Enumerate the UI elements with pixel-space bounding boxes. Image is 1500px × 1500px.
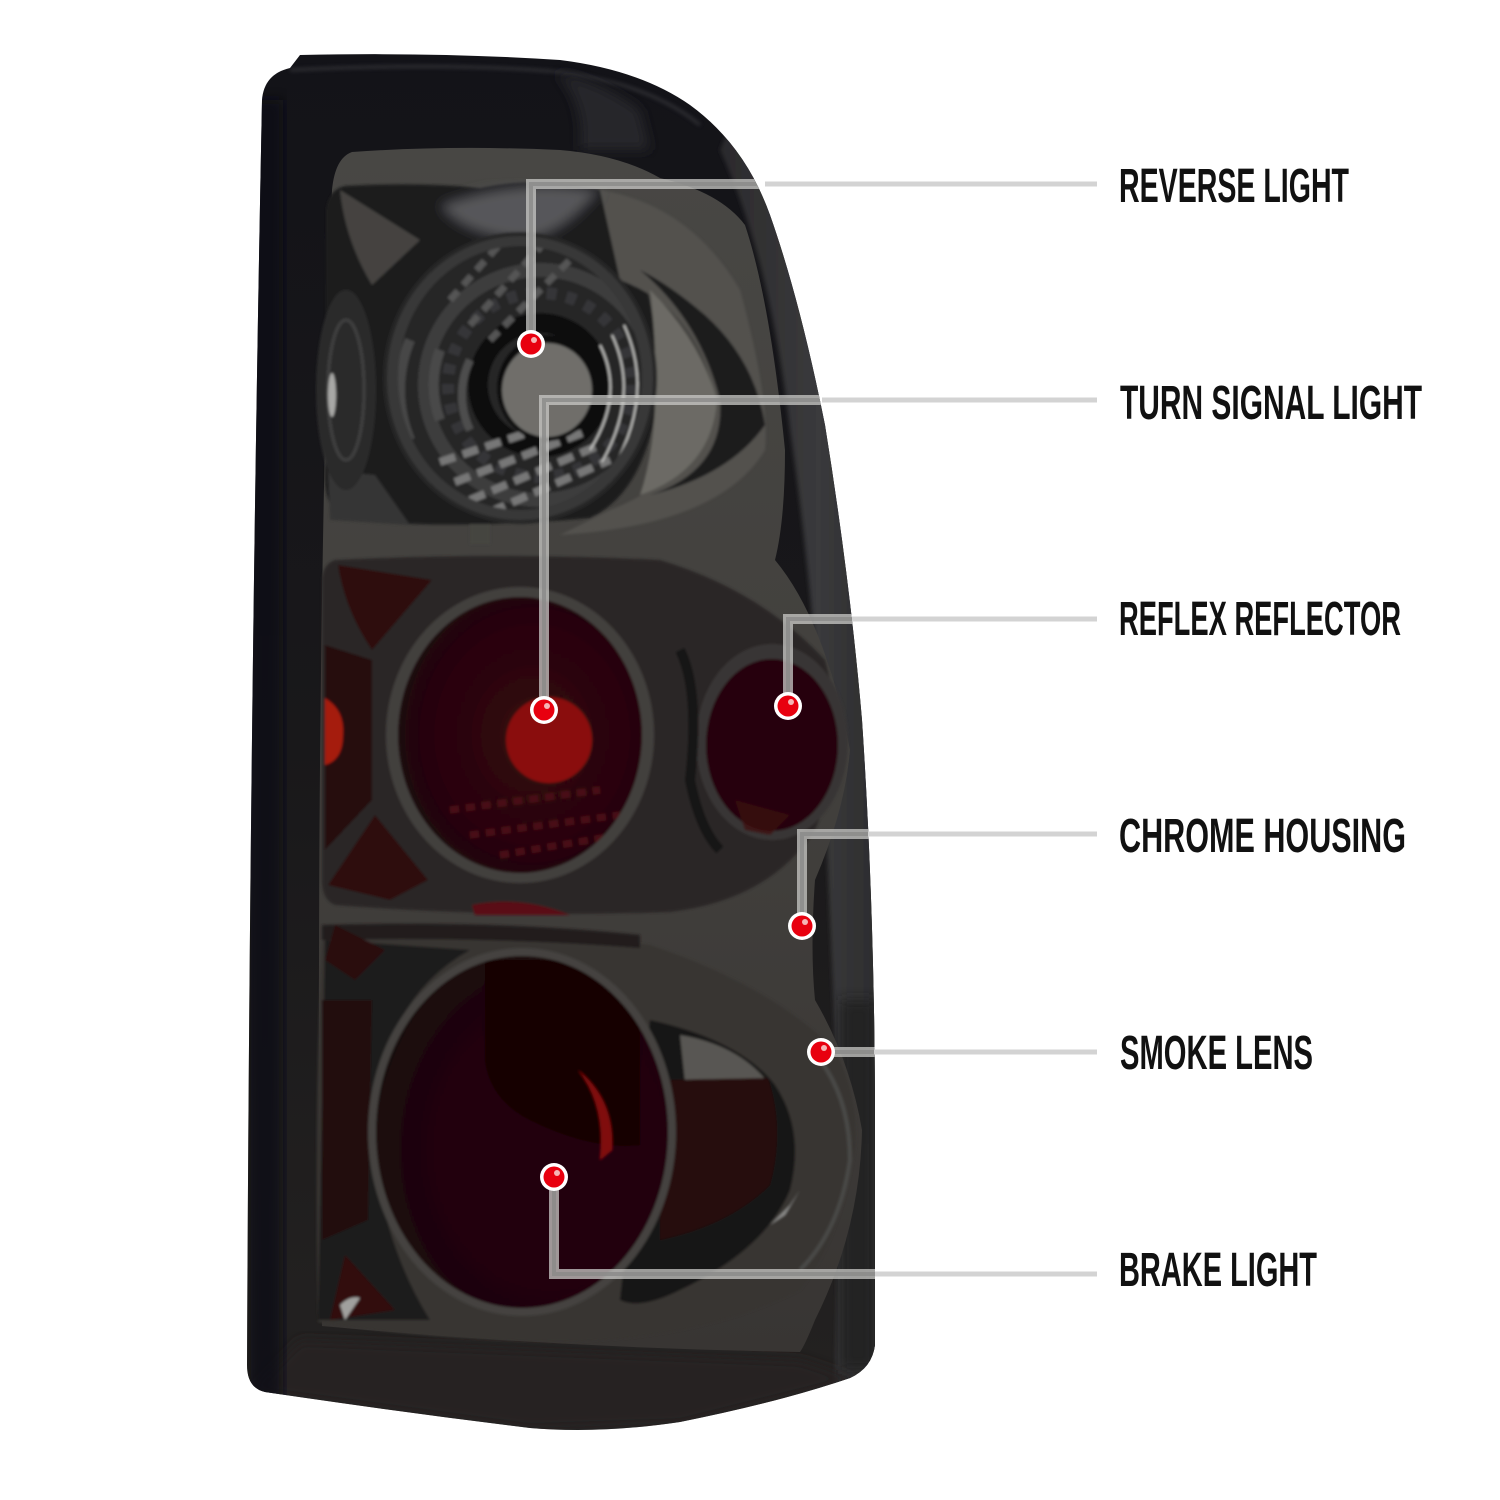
housing body	[247, 54, 875, 1430]
housing shading	[247, 66, 900, 1430]
label: smoke lens: SMOKE LENS	[1120, 1027, 1313, 1080]
lower chamber: brake light	[317, 924, 856, 1342]
right extension red	[660, 1078, 777, 1240]
interior details	[316, 182, 856, 1342]
swoosh reflector surround	[560, 190, 766, 535]
brake rim	[368, 948, 676, 1316]
turn signal rim	[386, 587, 654, 883]
tail light assembly	[247, 54, 900, 1430]
chamber backing	[317, 925, 856, 1342]
corner facet left bottom	[328, 470, 410, 525]
center bulb opening	[497, 335, 597, 441]
right extension bulb cap	[680, 1035, 770, 1085]
dark left surround	[318, 940, 470, 1320]
turn signal red bulb	[506, 697, 592, 783]
reflex reflector lens	[706, 659, 838, 831]
dot: smoke lens	[807, 1038, 835, 1066]
callout dots	[517, 330, 835, 1191]
label: reverse light: REVERSE LIGHT	[1119, 160, 1349, 213]
dot: reflex reflector	[774, 692, 802, 720]
corner facet left top	[340, 190, 420, 285]
chamber backing	[325, 182, 660, 525]
lens right curve	[800, 1060, 850, 1270]
red corners	[338, 565, 432, 650]
labels	[1119, 160, 1422, 1297]
dot: reverse light	[517, 330, 545, 358]
lens ring	[385, 234, 655, 522]
dot: turn signal light	[530, 696, 558, 724]
right extension outline	[620, 1020, 795, 1303]
smoke lens	[319, 148, 862, 1352]
dot: chrome housing	[788, 912, 816, 940]
label: brake light: BRAKE LIGHT	[1119, 1244, 1317, 1297]
dot: brake light	[540, 1163, 568, 1191]
top glass highlight	[440, 185, 600, 240]
chamber backing	[322, 556, 835, 914]
middle chamber: turn signal and reflex reflector	[322, 556, 848, 915]
mount tab	[470, 524, 490, 544]
lower highlight	[770, 1190, 800, 1225]
turn signal lens	[398, 597, 642, 873]
brake lens	[376, 956, 668, 1308]
upper chamber: reverse light	[316, 182, 766, 544]
callout lines	[531, 184, 1097, 1274]
side red glow	[325, 698, 343, 765]
side reflector	[316, 290, 376, 490]
facets	[398, 246, 641, 510]
line: outside housing	[765, 184, 1097, 1274]
red corners	[325, 925, 385, 980]
reflex reflector rim	[696, 644, 848, 840]
line: inside housing	[531, 184, 900, 1274]
